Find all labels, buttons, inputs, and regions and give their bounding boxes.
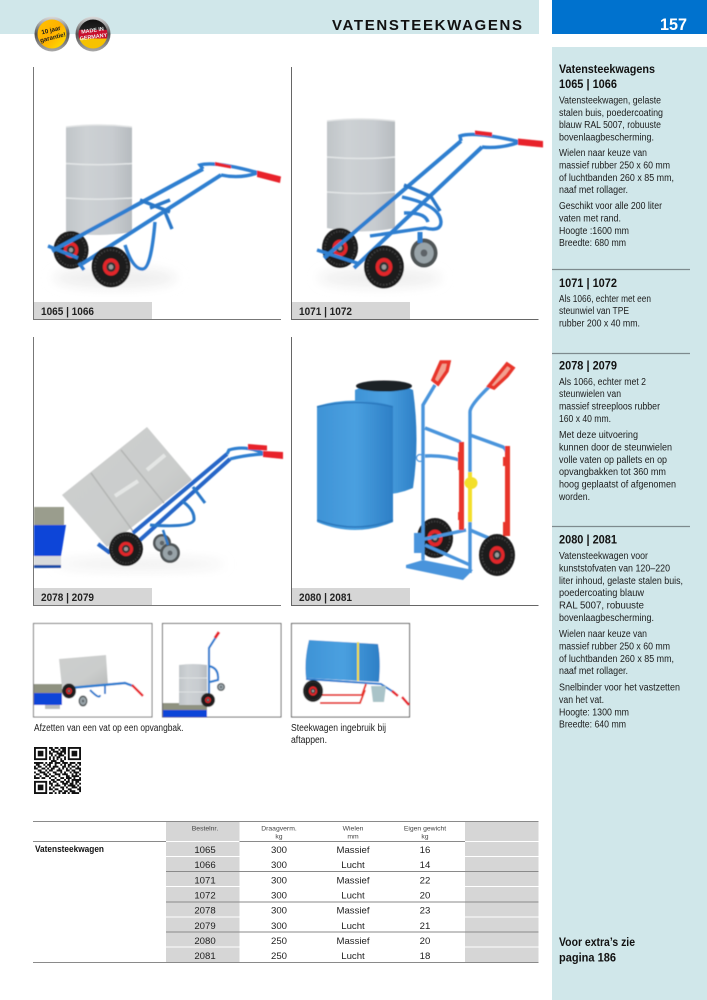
- table rows: 1065: [194, 845, 216, 856]
- photo: trolley in use for draining: [292, 624, 410, 717]
- sidebar section: 2080 2081: [559, 532, 683, 730]
- caption: draining: [291, 723, 386, 746]
- table header: Draagverm.: [261, 826, 297, 832]
- table rows: 21: [420, 921, 430, 932]
- sidebar section: 2080 2081: naaf met rollager.: [559, 666, 628, 677]
- sidebar section: 2080 2081: van het vat.: [559, 695, 604, 706]
- sidebar section: 2080 2081: liter inhoud, gelaste stalen buis,: [559, 576, 683, 587]
- illustration: tilted drum on trolley with spill pallet: [34, 427, 283, 570]
- row label: Vatensteekwagen: [35, 844, 104, 855]
- sidebar section: 2080 2081: RAL 5007, robuuste: [559, 600, 644, 612]
- sidebar note: extras: pagina 186: [559, 950, 616, 964]
- table header: [192, 826, 446, 840]
- sidebar section: 2078 2079: [558, 358, 676, 503]
- sidebar section: 2080 2081: Snelbinder voor het vastzetten: [559, 682, 680, 694]
- sidebar section: 2078 2079: volle vaten op pallets en op: [559, 455, 667, 466]
- sidebar section: 1065 1066: Vatensteekwagen, gelaste: [559, 96, 661, 106]
- sidebar section: 1071 1072: 1071 | 1072: [559, 276, 617, 290]
- sidebar section: 1065 1066: Wielen naar keuze van: [559, 148, 647, 159]
- table header: kg: [421, 834, 429, 840]
- table rows: 300: [271, 921, 287, 932]
- table header: Bestelnr.: [192, 826, 218, 832]
- table rows: Lucht: [341, 860, 365, 871]
- sidebar section: 2078 2079: opvangbakken tot 360 mm: [559, 467, 666, 478]
- sidebar section: 2078 2079: 160 x 40 mm.: [559, 414, 611, 425]
- sidebar section: 1065 1066: Geschikt voor alle 200 liter: [559, 201, 663, 212]
- caption: draining: Steekwagen ingebruik bij: [291, 723, 386, 734]
- header band: [0, 0, 539, 34]
- table rows: 1066: [194, 860, 216, 871]
- sidebar section: 2078 2079: Met deze uitvoering: [559, 430, 638, 441]
- table rows: 2079: [194, 921, 216, 932]
- sidebar section: 1065 1066: stalen buis, poedercoating: [559, 108, 663, 119]
- table rows: 300: [271, 906, 287, 916]
- table header: Wielen: [343, 826, 364, 832]
- sidebar section: 2078 2079: Als 1066, echter met 2: [559, 377, 646, 388]
- panel: photo 1071 1072: [292, 67, 543, 320]
- sidebar section: 2078 2079: hoog geplaatst of afgenomen: [559, 480, 676, 490]
- label 2080 2081: 2080 | 2081: [299, 592, 352, 604]
- label 1065 1066: 1065 | 1066: [41, 306, 94, 318]
- sidebar section: 1071 1072: [559, 276, 651, 330]
- sidebar section: 1071 1072: Als 1066, echter met een: [559, 294, 651, 305]
- sidebar section: 2080 2081: Wielen naar keuze van: [559, 629, 647, 640]
- table rows: 1071: [194, 876, 216, 886]
- sidebar note: extras: Voor extra’s zie: [559, 935, 635, 949]
- table rows: 23: [420, 906, 430, 916]
- sidebar section: 1071 1072: steunwiel van TPE: [559, 306, 629, 317]
- table rows: 18: [420, 951, 430, 962]
- table rows: 250: [271, 951, 287, 962]
- title: VATENSTEEKWAGENS: [332, 17, 522, 34]
- panel: sidebar: [552, 47, 707, 1000]
- badge: 10 jaar garantie: [34, 16, 70, 52]
- table rows: 2081: [194, 951, 216, 962]
- table rows: 20: [420, 936, 430, 947]
- sidebar section: 2080 2081: Vatensteekwagen voor: [559, 551, 649, 562]
- sidebar section: 2078 2079: worden.: [558, 492, 590, 503]
- specification table: [33, 822, 538, 962]
- sidebar section: 1065 1066: 1065 | 1066: [559, 77, 617, 91]
- sidebar note: extras: [559, 935, 635, 964]
- table rows: 22: [420, 876, 430, 886]
- sidebar section: 2080 2081: Hoogte: 1300 mm: [559, 708, 629, 718]
- caption: draining: aftappen.: [291, 735, 327, 746]
- table rows: 250: [271, 936, 287, 947]
- sidebar section: 1065 1066: of luchtbanden 260 x 85 mm,: [559, 173, 674, 184]
- sidebar section: 1065 1066: massief rubber 250 x 60 mm: [559, 160, 670, 172]
- table rows: Lucht: [341, 921, 365, 932]
- sidebar section: 1065 1066: bovenlaagbescherming.: [559, 132, 654, 144]
- table rows: 1072: [194, 890, 216, 902]
- illustration: plastic drums and upright trolley: [317, 362, 515, 580]
- photo: drum placed on spill pallet: [34, 624, 152, 717]
- sidebar section: 1065 1066: blauw RAL 5007, robuuste: [559, 120, 661, 131]
- table rows: 16: [420, 845, 430, 856]
- table rows: Massief: [336, 845, 370, 856]
- table header: mm: [347, 834, 359, 840]
- illustration: trolley with drum and support wheel: [317, 119, 543, 288]
- table rows: Massief: [336, 876, 370, 886]
- table rows: 300: [271, 860, 287, 871]
- table rows: 2078: [194, 906, 216, 916]
- badge: 10 jaar garantie: garantie!: [39, 31, 66, 44]
- table rows: Massief: [336, 936, 370, 947]
- sidebar section: 2080 2081: bovenlaagbescherming.: [559, 613, 654, 624]
- badge: made in Germany: GERMANY: [79, 33, 108, 42]
- sidebar section: 1065 1066: Vatensteekwagens: [559, 62, 655, 76]
- table header: Eigen gewicht: [404, 826, 446, 832]
- sidebar section: 2078 2079: 2078 | 2079: [559, 358, 617, 372]
- table rows: 300: [271, 845, 287, 856]
- sidebar section: 2080 2081: of luchtbanden 260 x 85 mm,: [559, 654, 674, 665]
- sidebar section: 2078 2079: kunnen door de steunwielen: [559, 442, 672, 454]
- QR code: [34, 747, 81, 794]
- table header: kg: [275, 834, 283, 840]
- table rows: Massief: [336, 906, 370, 916]
- table rows: 300: [271, 876, 287, 886]
- photo: drum lowered upright on pallet: [162, 624, 281, 717]
- sidebar section: 2080 2081: Breedte: 640 mm: [559, 720, 626, 730]
- illustration: trolley with steel drum: [48, 125, 281, 288]
- panel: photo 2080 2081: [292, 337, 538, 606]
- sidebar section: 2080 2081: 2080 | 2081: [559, 532, 617, 546]
- page number block: [552, 0, 707, 34]
- table rows: [194, 845, 431, 962]
- sidebar section: 1065 1066: naaf met rollager.: [559, 185, 628, 196]
- table rows: 20: [420, 890, 430, 902]
- label 1071 1072: 1071 | 1072: [299, 306, 352, 318]
- table rows: 2080: [194, 936, 216, 947]
- caption: drum on pallet: Afzetten van een vat op een opvangbak.: [34, 723, 184, 734]
- sidebar section: 1071 1072: rubber 200 x 40 mm.: [559, 318, 640, 330]
- table rows: Lucht: [341, 951, 365, 962]
- label 2078 2079: 2078 | 2079: [41, 592, 94, 604]
- sidebar section: 2078 2079: massief streeploos rubber: [559, 402, 661, 412]
- table rows: Lucht: [341, 890, 365, 902]
- page number block: 157: [660, 16, 687, 34]
- sidebar section: 1065 1066: [559, 62, 674, 249]
- badge: made in Germany: MADE IN: [81, 26, 104, 36]
- sidebar section: 1065 1066: Breedte: 680 mm: [559, 238, 626, 249]
- table rows: 14: [420, 860, 431, 871]
- panel: photo 1065 1066: [34, 67, 281, 320]
- sidebar section: 2080 2081: massief rubber 250 x 60 mm: [559, 642, 670, 652]
- badge: 10 jaar garantie: 10 jaar: [41, 25, 62, 36]
- sidebar section: 2078 2079: steunwielen van: [559, 389, 621, 400]
- badge: made in Germany: [76, 16, 110, 52]
- sidebar section: 1065 1066: Hoogte :1600 mm: [559, 226, 629, 237]
- panel: photo 2078 2079: [34, 337, 283, 606]
- sidebar section: 2080 2081: kunststofvaten van 120–220: [559, 564, 670, 574]
- sidebar section: 1065 1066: vaten met rand.: [559, 214, 621, 224]
- table rows: 300: [271, 890, 287, 902]
- sidebar section: 2080 2081: poedercoating blauw: [559, 588, 645, 599]
